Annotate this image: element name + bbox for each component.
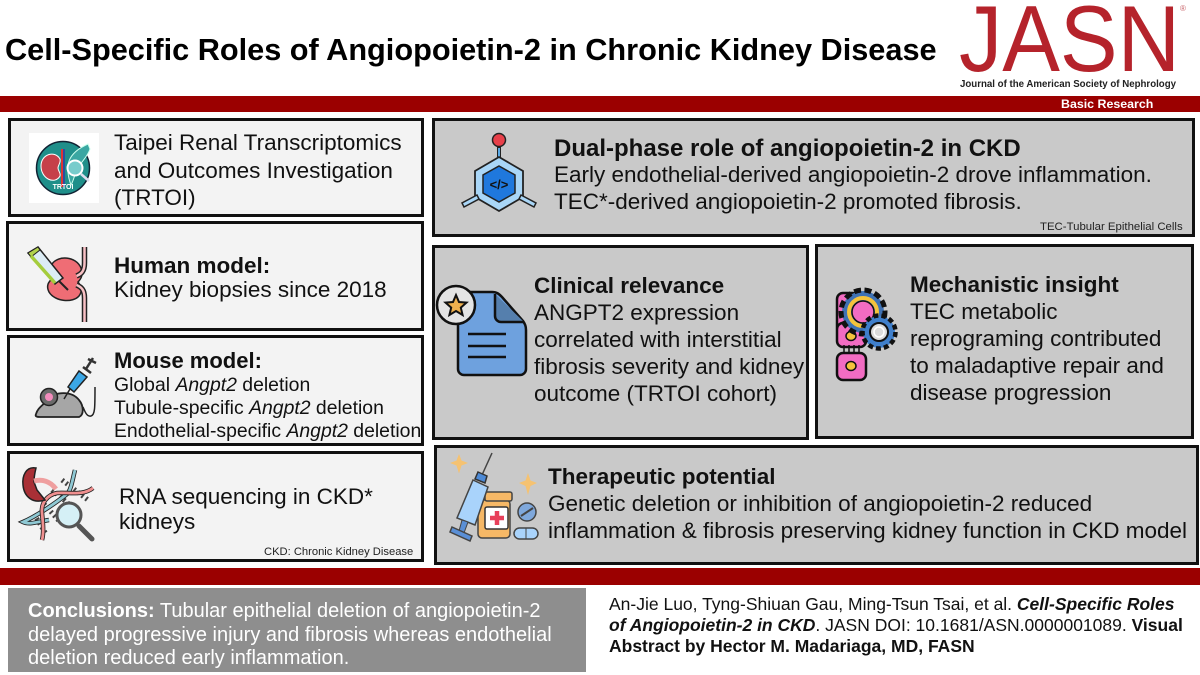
text: mouse model (114, 348, 421, 442)
text: mechanistic insight (910, 272, 1164, 405)
text: RNA sequencing (119, 484, 373, 534)
top red banner (0, 96, 1200, 112)
text: conclusions (28, 600, 552, 669)
text: mechanistic insight: Mechanistic insight (910, 272, 1119, 297)
text: TRTOI: and Outcomes Investigation (114, 158, 393, 182)
footnote: CKD: CKD: Chronic Kidney Disease (264, 546, 413, 558)
text: clinical relevance: fibrosis severity and kidney (534, 354, 804, 379)
text: clinical relevance: outcome (TRTOI cohort) (534, 381, 777, 406)
text: clinical relevance: ANGPT2 expression (534, 300, 739, 325)
JASN logo: ® (1180, 4, 1186, 13)
text: RNA sequencing: RNA sequencing in CKD* (119, 484, 373, 509)
text: human model (114, 253, 387, 302)
text: clinical relevance: correlated with interstitial (534, 327, 782, 352)
text: therapeutic: Genetic deletion or inhibition of angiopoietin-2 reduced (548, 491, 1092, 516)
text: dual-phase: Early endothelial-derived angiopoietin-2 drove inflammation. (554, 162, 1152, 187)
text: dual-phase: TEC*-derived angiopoietin-2 promoted fibrosis. (554, 188, 1022, 214)
icon: TRTOI logo (29, 133, 99, 203)
text: mouse model: Endothelial-specific Angpt2 deletion (114, 420, 421, 442)
text: mechanistic insight: disease progression (910, 380, 1111, 405)
icon: kidney DNA magnifier (18, 467, 94, 542)
panel: RNA sequencing (7, 451, 424, 562)
text: conclusions: delayed progressive injury and fibrosis whereas endothelial (28, 624, 552, 646)
JASN logo: Journal of the American Society of Nephrology (960, 79, 1176, 90)
text: human model: Human model: (114, 253, 270, 278)
text: mouse model: Tubule-specific Angpt2 deletion (114, 396, 384, 418)
text: human model: Kidney biopsies since 2018 (114, 277, 387, 302)
icon: molecule: </> (490, 177, 509, 192)
text: clinical relevance: Clinical relevance (534, 273, 724, 298)
text: TRTOI: (TRTOI) (114, 185, 196, 210)
top red banner: Basic Research (1061, 97, 1153, 111)
text: therapeutic: Therapeutic potential (548, 464, 776, 489)
icon: TRTOI logo: TRTOI (53, 184, 73, 191)
text: mouse model: Mouse model: (114, 348, 262, 372)
text: RNA sequencing: kidneys (119, 509, 195, 534)
text: conclusions: Conclusions: Tubular epithelial deletion of angiopoietin-2 (28, 600, 541, 622)
text: conclusions: deletion reduced early inflammation. (28, 647, 349, 669)
icon: kidney biopsy (26, 246, 88, 322)
text: therapeutic: inflammation & fibrosis preserving kidney function in CKD model (548, 518, 1187, 543)
icon: mouse with syringe (34, 357, 96, 418)
bottom red banner (0, 568, 1200, 585)
citation (609, 594, 1183, 656)
text: mechanistic insight: reprograming contributed (910, 326, 1161, 351)
text: clinical relevance (534, 273, 804, 406)
panel: mechanistic insight (815, 244, 1194, 439)
panel: clinical relevance (432, 245, 809, 440)
text: mouse model: Global Angpt2 deletion (114, 374, 310, 396)
footnote: TEC: TEC-Tubular Epithelial Cells (1040, 221, 1183, 233)
text: mechanistic insight: to maladaptive repair and (910, 353, 1164, 378)
panel: therapeutic potential (434, 445, 1199, 565)
text: TRTOI: Taipei Renal Transcriptomics (114, 130, 402, 155)
citation: of Angiopoietin-2 in CKD. JASN DOI: 10.1681/ASN.0000001089. Visual (609, 615, 1183, 635)
panel: conclusions (8, 588, 586, 672)
text: therapeutic (548, 464, 1187, 543)
panel: TRTOI cohort (8, 118, 424, 217)
text: dual-phase (554, 134, 1152, 214)
icon: syringe and medicine (449, 452, 539, 542)
text: mechanistic insight: TEC metabolic (910, 299, 1058, 324)
icon: document with star (436, 284, 528, 376)
text: dual-phase: Dual-phase role of angiopoietin-2 in CKD (554, 134, 1021, 162)
text: TRTOI (114, 130, 402, 210)
panel: dual-phase role (432, 118, 1195, 237)
title: Cell-Specific Roles of Angiopoietin-2 in Chronic Kidney Disease (5, 32, 937, 67)
icon: cell gears (836, 288, 898, 382)
citation: An-Jie Luo, Tyng-Shiuan Gau, Ming-Tsun Tsai, et al. Cell-Specific Roles (609, 594, 1174, 614)
panel: human model (6, 221, 424, 331)
panel: mouse model (7, 335, 424, 446)
citation: Abstract by Hector M. Madariaga, MD, FASN (609, 636, 975, 656)
icon: molecule (461, 132, 537, 212)
